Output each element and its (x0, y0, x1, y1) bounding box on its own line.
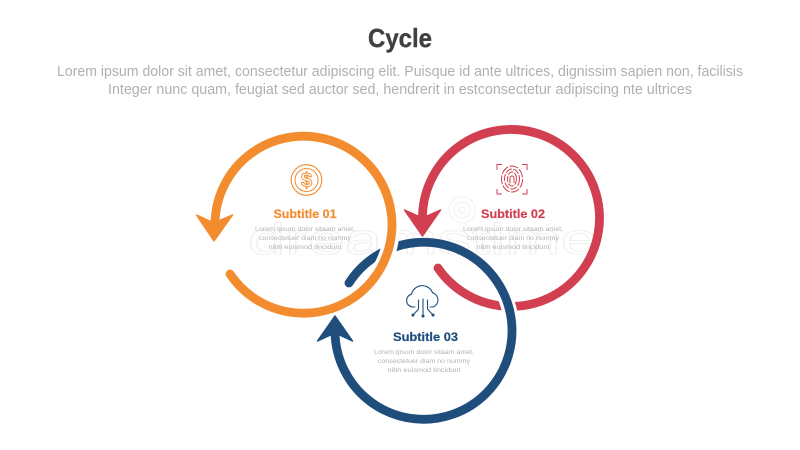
text block: subtitle 03 (374, 349, 474, 374)
orange ring arrow (196, 136, 392, 313)
text block: subtitle 01: nibh euismod tincidunt (268, 244, 342, 251)
text block: subtitle 02: nibh euismod tincidunt (476, 244, 550, 251)
icon: dollar coin (291, 165, 322, 195)
heading: subtitle 02: Subtitle 02 (481, 207, 545, 221)
text block: subtitle 02: Lorem ipsum dolor sitaam amet, (463, 226, 563, 233)
text block: subtitle 03: Lorem ipsum dolor sitaam amet, (374, 349, 474, 356)
heading: subtitle 01: Subtitle 01 (274, 207, 337, 221)
blue ring arrow (318, 242, 512, 419)
text block: subtitle 01 (255, 226, 355, 251)
text block: subtitle 02 (463, 226, 563, 251)
heading: subtitle 03: Subtitle 03 (393, 330, 458, 344)
text block: subtitle 01: consectetuer diam no nummy (259, 235, 352, 242)
red ring arrow (404, 129, 599, 306)
text block: subtitle 03: nibh euismod tincidunt (388, 367, 461, 374)
text block: subtitle 03: consectetuer diam no nummy (378, 358, 471, 365)
text block: subtitle 01: Lorem ipsum dolor sitaam amet, (255, 226, 355, 233)
intro text: Lorem ipsum dolor sit amet, consectetur adipiscing elit. Puisque id ante ultrices, dignissim sapien non, facilisis (57, 63, 743, 80)
text block: subtitle 02: consectetuer diam no nummy (467, 235, 560, 242)
icon: fingerprint (497, 164, 527, 194)
title: Cycle (368, 23, 432, 53)
watermark (248, 197, 598, 264)
panel: subtitle 01 (196, 136, 392, 313)
panel: subtitle 02 (404, 129, 599, 306)
intro text (57, 63, 743, 98)
watermark: dreamstime (248, 215, 598, 264)
icon: dollar coin: $ (301, 170, 312, 192)
panel: subtitle 03 (318, 242, 512, 419)
icon: cloud network (407, 286, 438, 317)
intro text: Integer nunc quam, feugiat sed auctor sed, hendrerit in estconsectetur adipiscing nte ultrices (108, 81, 692, 98)
